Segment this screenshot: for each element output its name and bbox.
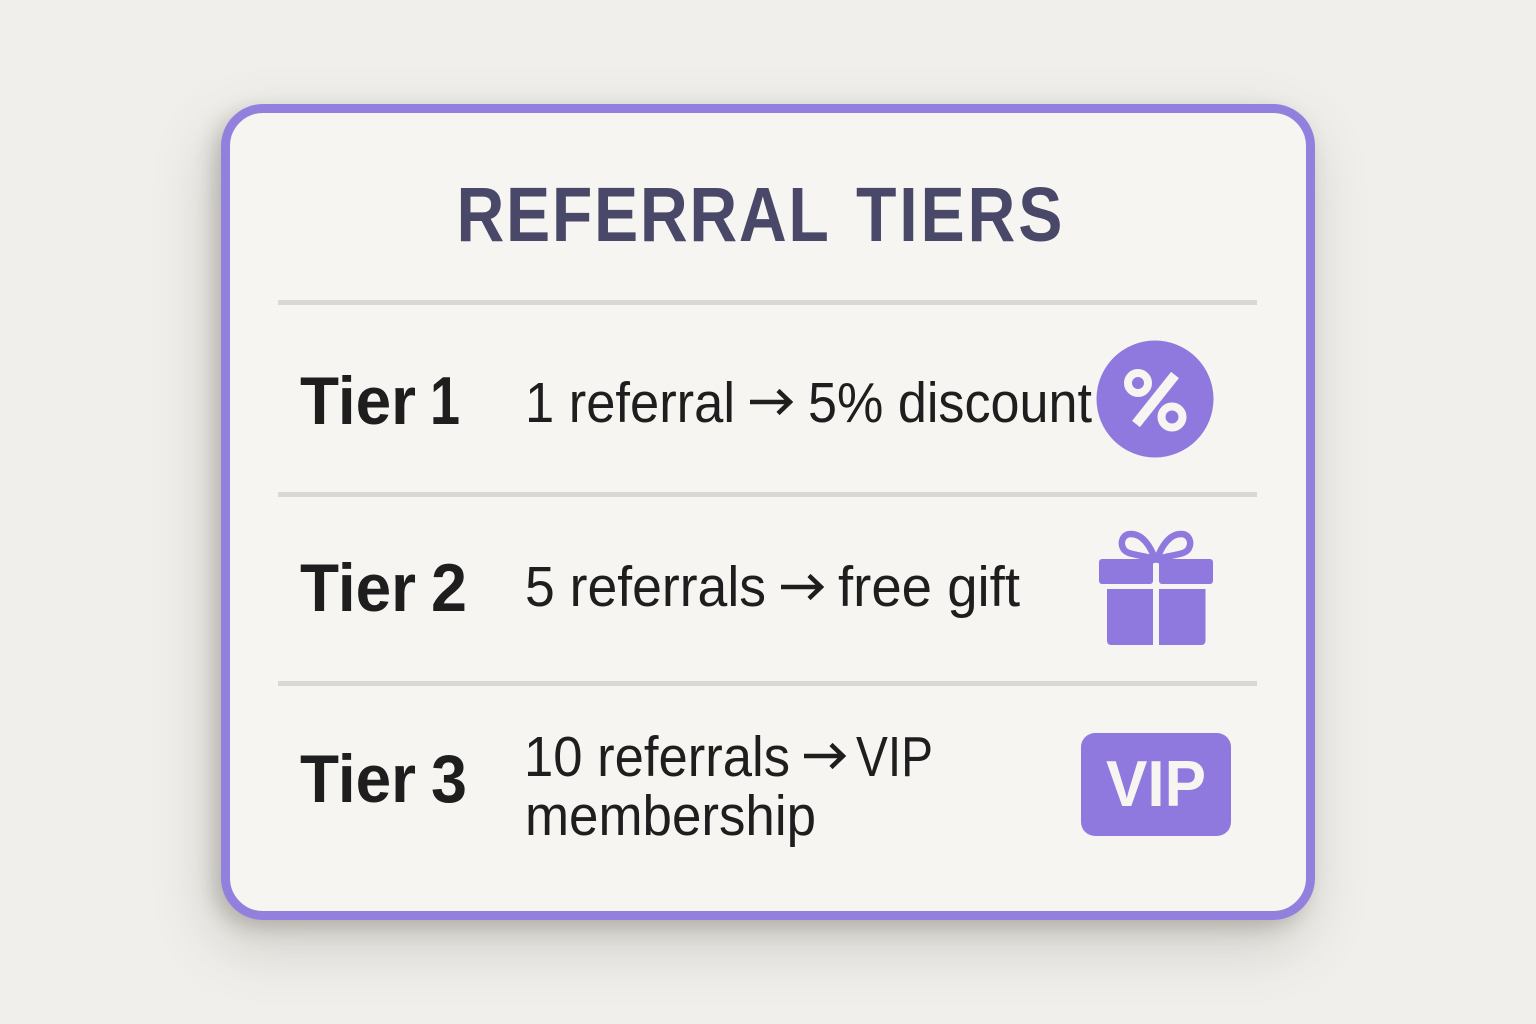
tier 2 description: free gift (838, 555, 1020, 619)
panel: referral tiers card (221, 104, 1315, 920)
arrow (750, 390, 790, 414)
title: TIERS (856, 172, 1062, 258)
tier 2 label: 2 (431, 550, 467, 626)
tier 2 description: 5 referrals (525, 555, 766, 619)
icon: VIP badge (1081, 733, 1231, 836)
arrow (804, 744, 843, 768)
tier 2 description (525, 555, 1020, 619)
tier 2 label: Tier (300, 550, 416, 626)
title (456, 172, 1062, 258)
tier 1 description: 5% discount (808, 371, 1092, 435)
tier 3 description: membership (525, 784, 816, 848)
tier 3 description: VIP (856, 725, 933, 789)
row: tier 2 (300, 534, 1213, 645)
title: REFERRAL (456, 172, 829, 258)
tier 3 label: 3 (431, 741, 467, 817)
icon: gift box (1099, 534, 1213, 645)
icon: percent badge (1096, 340, 1214, 458)
icon: VIP badge: VIP (1106, 747, 1206, 820)
tier 1 description (525, 371, 1092, 435)
row: tier 3 (300, 725, 1231, 848)
tier 3 description (524, 725, 933, 848)
tier 1 label: Tier (300, 363, 416, 439)
row: tier 1 (300, 340, 1214, 458)
tier 1 description: 1 referral (525, 371, 735, 435)
tier 1 label: 1 (430, 363, 460, 439)
arrow (781, 576, 821, 598)
tier 3 label: Tier (300, 741, 416, 817)
tier 3 description: 10 referrals (524, 725, 790, 789)
